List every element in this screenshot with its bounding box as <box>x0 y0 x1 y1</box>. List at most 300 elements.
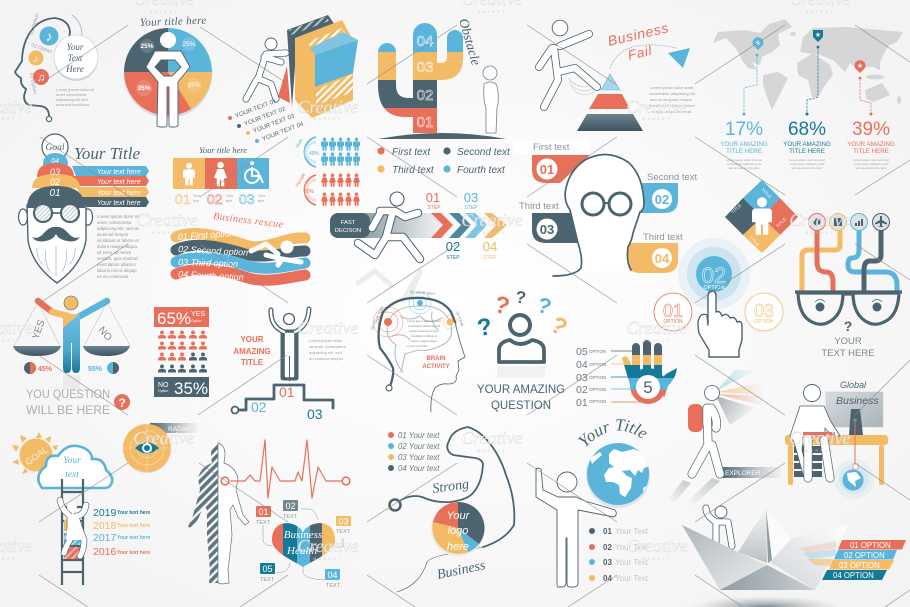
lorem column: Ut enim ad minim <box>97 250 132 255</box>
legend: 03 Your text <box>398 453 440 462</box>
bar: FAST <box>341 220 356 226</box>
option stripes: 03 OPTION <box>839 561 880 570</box>
lorem text <box>649 85 696 114</box>
question text: QUESTION <box>491 400 551 412</box>
stacked arches: 04 <box>51 158 59 165</box>
rotated labels: 01 YOUR TEXT <box>370 305 385 330</box>
watermark: creative market marks: MARKET <box>805 10 835 14</box>
panel: head with music options: 02 Option <box>30 42 53 55</box>
bust icon <box>499 315 544 362</box>
pin blue <box>742 37 764 115</box>
watermark: creative market marks: Creative <box>461 428 523 448</box>
option list: OPTION <box>589 349 606 354</box>
lorem column: adipiscing elit, sed do <box>97 226 140 231</box>
lorem text: sit amet, consectetur <box>309 344 347 349</box>
figure <box>38 296 107 373</box>
lorem text: adipiscing elit, sed <box>309 350 342 355</box>
arm outline <box>390 427 514 592</box>
option list: 01 <box>576 397 588 409</box>
podium <box>232 384 333 422</box>
panel: pie chart with person: 25% <box>140 43 154 50</box>
title: Your title here <box>199 145 247 155</box>
pin blue: ★ <box>755 39 761 47</box>
head profile <box>379 298 465 412</box>
tag 02: TEXT <box>283 514 298 520</box>
watermark: creative market marks: MARKET <box>477 10 507 14</box>
watermark: creative market marks: Creative <box>133 428 195 448</box>
option 03: 03 <box>754 301 774 321</box>
watermark: creative market marks: MARKET <box>805 231 835 235</box>
question text: YOU QUESTION <box>26 387 110 401</box>
lorem text: sed do eiusmod tempor <box>650 97 692 102</box>
tag 01: 01 <box>258 507 269 517</box>
pin red: ★ <box>857 62 863 70</box>
panel: paper boat <box>682 506 906 607</box>
watermark: creative market marks: MARKET <box>152 231 182 235</box>
panel: head with music options <box>15 13 98 122</box>
person pushing <box>246 38 286 99</box>
ribbon labels: 04 Fourth option <box>178 269 244 282</box>
shadow <box>690 596 840 607</box>
panel: glasses with pipes <box>795 214 902 359</box>
option 03: OPTION <box>754 319 774 325</box>
option list: 02 <box>576 384 588 396</box>
boat rays <box>800 541 836 566</box>
question marks <box>475 287 572 342</box>
panel: world map <box>713 19 903 170</box>
watermark: creative market marks: Creative <box>626 536 688 556</box>
step 02: 02 <box>446 239 460 254</box>
panel: 65 35 people grid <box>154 307 209 398</box>
stat 17 <box>720 119 768 170</box>
stat 39 <box>847 119 895 170</box>
business label: Business <box>436 558 487 583</box>
tile labels: 01 <box>175 191 191 207</box>
lorem: dolore magna aliqua <box>411 339 437 343</box>
small person <box>483 66 498 133</box>
lorem text: eiusmod incididunt <box>56 102 90 107</box>
tab 02: 02 <box>655 192 669 207</box>
stat 45: 45% <box>38 366 53 373</box>
option 02: 02 <box>702 263 726 288</box>
timeline: 2019 <box>93 507 117 519</box>
tab 02 <box>640 172 698 213</box>
option list: OPTION <box>589 375 606 380</box>
legend list: YOUR TEXT 01 <box>234 97 278 120</box>
tag 02: 02 <box>285 501 296 511</box>
male donut: Male <box>295 137 304 148</box>
heading: Business <box>606 19 670 49</box>
panel: five options hand <box>576 340 677 406</box>
person in boat <box>706 506 732 546</box>
lorem text: adipiscing elit sed <box>56 97 88 102</box>
light rays <box>716 370 765 425</box>
round glasses <box>582 193 631 215</box>
pulse line <box>221 440 350 498</box>
watermark: creative market marks: Creative <box>297 318 359 338</box>
watermark: creative market marks: MARKET <box>149 10 179 14</box>
watermark: creative market marks: MARKET <box>149 449 179 453</box>
brain targets <box>373 292 457 337</box>
stat 68: YOUR AMAZING <box>783 141 831 148</box>
watermark: creative market marks: Creative <box>789 428 851 448</box>
tile labels: 02 <box>207 191 223 207</box>
stat 17: 17% <box>725 119 763 140</box>
panel: head with music options: 01 Option <box>29 13 41 36</box>
option 02 <box>678 238 750 310</box>
panel: person with globe <box>536 419 650 588</box>
stat 17: consectetur adipiscing elit <box>727 162 761 166</box>
yes box: YES <box>191 311 205 318</box>
stacked arches: 03 <box>50 167 60 177</box>
lorem column: amet, consectetur <box>97 220 132 225</box>
legend list <box>228 97 305 143</box>
swimmer <box>251 240 301 265</box>
stat 55: 55% <box>88 366 103 373</box>
option list: 05 <box>576 346 588 358</box>
option 01: OPTION <box>663 319 683 325</box>
panel: obstacle cactus <box>370 15 511 176</box>
bar <box>330 213 470 238</box>
female figures <box>321 173 360 206</box>
question badge: ? <box>118 396 126 410</box>
watermark: creative market marks: Creative <box>136 210 198 230</box>
list: 04 <box>603 574 612 583</box>
tab 04: Third text <box>643 232 683 243</box>
stat 17: TITLE HERE <box>726 148 762 155</box>
yes box: 65% <box>157 309 191 328</box>
tile labels: text <box>258 199 264 203</box>
option list: 04 <box>576 359 588 371</box>
stacked arches: 02 <box>50 177 60 187</box>
step 03: STEP <box>464 205 478 211</box>
ribbons: Your text here <box>97 169 141 176</box>
timeline: Your text here <box>117 535 150 541</box>
lorem: ut enim ad minim <box>406 344 428 348</box>
heading: Business rescue <box>213 211 284 231</box>
pie quadrants <box>124 28 212 115</box>
step 04: STEP <box>483 255 497 261</box>
lorem text <box>56 87 95 107</box>
backpack <box>688 404 703 432</box>
pin red <box>855 60 872 116</box>
logo pie: here <box>447 541 469 553</box>
list: 02 <box>603 543 612 552</box>
head outline <box>15 18 70 116</box>
question marks: ? <box>491 291 513 321</box>
goal circle <box>42 134 68 160</box>
podium: 03 <box>307 406 323 422</box>
tag 04 <box>325 569 341 589</box>
lorem column: Lorem ipsum dolor sit <box>97 214 140 219</box>
cactus: 04 <box>417 33 433 50</box>
lorem text: consectetur adipiscing elit <box>649 91 696 96</box>
panel: pie chart with person: 15% <box>187 82 201 89</box>
tag 04: TEXT <box>326 583 341 589</box>
caption: YOUR <box>834 336 862 347</box>
boxes <box>278 15 358 118</box>
panel: diamond person <box>725 180 798 253</box>
tag 05: 05 <box>262 564 273 574</box>
panel: podium person <box>232 309 347 422</box>
stat 68: TITLE HERE <box>789 148 825 155</box>
question text: WILL BE HERE <box>26 403 110 417</box>
ribbon labels: 02 Second option <box>178 244 248 258</box>
cloud: Your <box>63 456 81 466</box>
list: 03 <box>603 558 612 567</box>
option list <box>576 346 640 409</box>
heading: TITLE <box>241 358 264 367</box>
icon badges <box>808 214 890 230</box>
callout: your text here: Your <box>67 42 84 52</box>
drawers <box>794 446 822 477</box>
heart <box>272 523 335 567</box>
kicking person <box>539 20 597 107</box>
panel: business fail <box>539 19 696 131</box>
lorem text: Lorem ipsum dolor sit <box>56 87 95 92</box>
tab 01: First text <box>533 142 570 153</box>
heading <box>233 335 271 367</box>
lorem column <box>97 214 140 279</box>
panel: head with music options: 03 Option <box>28 72 38 95</box>
logo pie: Your <box>447 510 471 522</box>
brain caption: ACTIVITY <box>422 364 450 370</box>
brain <box>387 306 452 372</box>
heading: Your Title <box>74 144 140 163</box>
cactus: 01 <box>417 114 433 131</box>
panel: radar <box>123 423 200 473</box>
tag 02 <box>283 500 298 520</box>
lorem: incididunt ut labore et <box>411 334 438 338</box>
heading text: Your Title <box>578 419 646 447</box>
heart: Business <box>284 529 322 541</box>
male donut <box>295 137 320 167</box>
wavy ribbons <box>176 233 305 280</box>
timeline: 2016 <box>93 546 117 558</box>
tile labels <box>175 191 266 207</box>
lorem text: magna aliqua enim ad <box>652 109 691 114</box>
legend: 01 Your text <box>398 431 440 440</box>
sun: GOAL <box>23 445 50 467</box>
desk <box>785 435 888 485</box>
female donut: Female <box>295 172 307 188</box>
option stripes: 02 OPTION <box>844 551 885 560</box>
female donut <box>295 172 316 205</box>
no box: NO <box>158 382 169 389</box>
reflection <box>63 375 80 390</box>
walker <box>692 386 720 474</box>
question text <box>477 384 565 412</box>
question marks: ? <box>475 313 494 342</box>
lorem text: Lorem ipsum dolor amet, <box>650 85 694 90</box>
stat 68: Lorem ipsum dolor sit amet <box>789 158 825 162</box>
yes box: Option <box>191 319 201 323</box>
person <box>146 32 190 127</box>
rotated labels: 03 YOUR <box>455 311 464 327</box>
explorer bar: EXPLORER <box>725 470 761 477</box>
lorem: consectetur adipiscing elit <box>408 324 440 328</box>
diamond quadrants: TITLE <box>775 216 787 229</box>
timeline: Your text here <box>117 523 150 529</box>
ribbons: Your text here <box>97 200 141 207</box>
heading: YOUR <box>240 335 264 344</box>
radar label: RADAR <box>168 426 191 433</box>
option 01 <box>654 293 692 331</box>
legend: Third text <box>392 165 435 176</box>
legend <box>388 431 440 473</box>
callout: your text here <box>54 35 98 81</box>
tab 01: 01 <box>540 162 554 177</box>
sun <box>12 432 58 474</box>
heading: AMAZING <box>233 347 271 356</box>
right pan: NO <box>96 325 114 344</box>
watermark: creative market marks: Creative <box>626 318 688 338</box>
radar disc <box>123 424 171 473</box>
tile labels: text <box>193 199 199 203</box>
lorem column: veniam, quis nostrud <box>97 256 138 261</box>
ribbon labels <box>177 228 248 282</box>
tab 03: Third text <box>519 201 559 212</box>
question marks: ? <box>534 292 555 320</box>
climber <box>60 500 86 556</box>
pin teal: ★ <box>815 31 821 39</box>
stat 68: consectetur adipiscing elit <box>790 162 824 166</box>
male donut: 40% <box>309 151 320 157</box>
timeline: 2018 <box>93 520 117 532</box>
hand: 5 <box>643 378 653 397</box>
stacked arches: 01 <box>49 188 61 199</box>
brain caption <box>422 356 450 370</box>
glasses <box>795 292 902 324</box>
callout: your text here: Here <box>65 64 84 74</box>
icon: note badge three: ♫ <box>37 72 45 84</box>
panel: male and female stats <box>295 137 360 206</box>
legend list: YOUR TEXT 04 <box>261 120 305 143</box>
panel: your amazing question <box>475 287 572 412</box>
option 02: OPTION <box>703 285 725 291</box>
body silhouette <box>188 443 249 584</box>
panel: pie chart with person: 35% <box>137 85 151 92</box>
stat 68: sed do eiusmod tempor <box>791 166 823 170</box>
bar: DECISON <box>335 228 361 234</box>
runner reflection <box>358 271 420 300</box>
ribbons: Your text here <box>97 179 141 186</box>
panel: body health <box>188 440 351 589</box>
tab 03: 03 <box>540 222 554 237</box>
person <box>752 197 772 235</box>
arrow <box>610 45 690 68</box>
stat 39: TITLE HERE <box>853 148 889 155</box>
tag 05 <box>260 563 275 583</box>
seated person <box>790 384 840 478</box>
female donut: 60% <box>304 189 315 195</box>
option list: OPTION <box>589 362 606 367</box>
rotated labels <box>370 290 464 330</box>
tag 03 <box>336 516 351 535</box>
legend: Second text <box>457 147 511 158</box>
ground <box>378 133 506 139</box>
left pan: YES <box>30 318 48 341</box>
callout: your text here: Text <box>68 53 83 63</box>
legend: 02 Your text <box>398 442 440 451</box>
panel: business rescue <box>176 211 305 282</box>
option stripes: 01 OPTION <box>850 541 891 550</box>
tile labels: Your <box>258 194 266 198</box>
tag 01: TEXT <box>256 520 271 526</box>
watermark: creative market marks: Creative <box>626 97 688 117</box>
logo pie <box>431 502 485 556</box>
person waving <box>536 468 616 587</box>
panel: hipster goal stack <box>18 134 149 283</box>
stat 39: 39% <box>852 119 890 140</box>
cactus <box>378 23 463 133</box>
tag 03: TEXT <box>336 529 351 535</box>
step 01: 01 <box>426 190 440 205</box>
legend list: YOUR TEXT 03 <box>252 112 296 135</box>
no box: 35% <box>174 379 208 398</box>
watermark: creative market marks: MARKET <box>477 231 507 235</box>
lorem column: eiusmod tempor <box>97 232 129 237</box>
question text: YOUR AMAZING <box>477 384 565 396</box>
list: Your Text <box>615 574 649 583</box>
diamond quadrants: TITLE <box>760 187 773 199</box>
stat 68: 68% <box>788 119 826 140</box>
watermark: creative market marks: MARKET <box>805 449 835 453</box>
heart: Health <box>286 545 317 557</box>
stat 17: YOUR AMAZING <box>720 141 768 148</box>
watermark: creative market marks: Creative <box>461 210 523 230</box>
watermark: creative market marks: Creative <box>297 97 359 117</box>
watermark: creative market marks: Creative <box>297 536 359 556</box>
lorem text <box>309 338 347 361</box>
icon: note badge one: ♪ <box>46 28 52 44</box>
caption: ? <box>844 318 852 334</box>
watermark: creative market marks: MARKET <box>313 117 343 121</box>
question text <box>26 387 110 417</box>
head silhouette <box>553 154 644 276</box>
ribbon labels: 01 First option <box>177 228 235 242</box>
bearded face <box>18 200 92 283</box>
goal circle: Goal <box>46 143 65 153</box>
list: Your Text <box>615 558 649 567</box>
watermark: creative market marks: MARKET <box>477 449 507 453</box>
tile labels: text <box>226 199 232 203</box>
title: Your title here <box>140 15 207 29</box>
pipes <box>802 231 897 291</box>
cloud <box>38 446 112 488</box>
lorem text: amet consectetur <box>56 92 87 97</box>
stat 17: sed do eiusmod tempor <box>728 166 760 170</box>
caption: TEXT HERE <box>821 348 875 359</box>
network line and globe <box>834 418 874 499</box>
lorem <box>406 319 441 348</box>
yes box <box>154 307 209 328</box>
podium: 01 <box>279 384 295 400</box>
watermark: creative market marks: MARKET <box>313 557 343 561</box>
pointing hand <box>698 291 742 357</box>
option list: 03 <box>576 372 588 384</box>
option list: OPTION <box>589 399 606 404</box>
curved heading path <box>584 430 654 449</box>
monitor text <box>836 380 879 407</box>
question marks: ? <box>546 311 572 342</box>
ladder <box>62 479 83 585</box>
tag 03: 03 <box>338 516 349 526</box>
legend: Fourth text <box>457 165 506 176</box>
brain caption: BRAIN <box>426 356 446 362</box>
panel: touch options <box>654 238 783 357</box>
ribbon labels: 03 Third option <box>178 257 238 269</box>
